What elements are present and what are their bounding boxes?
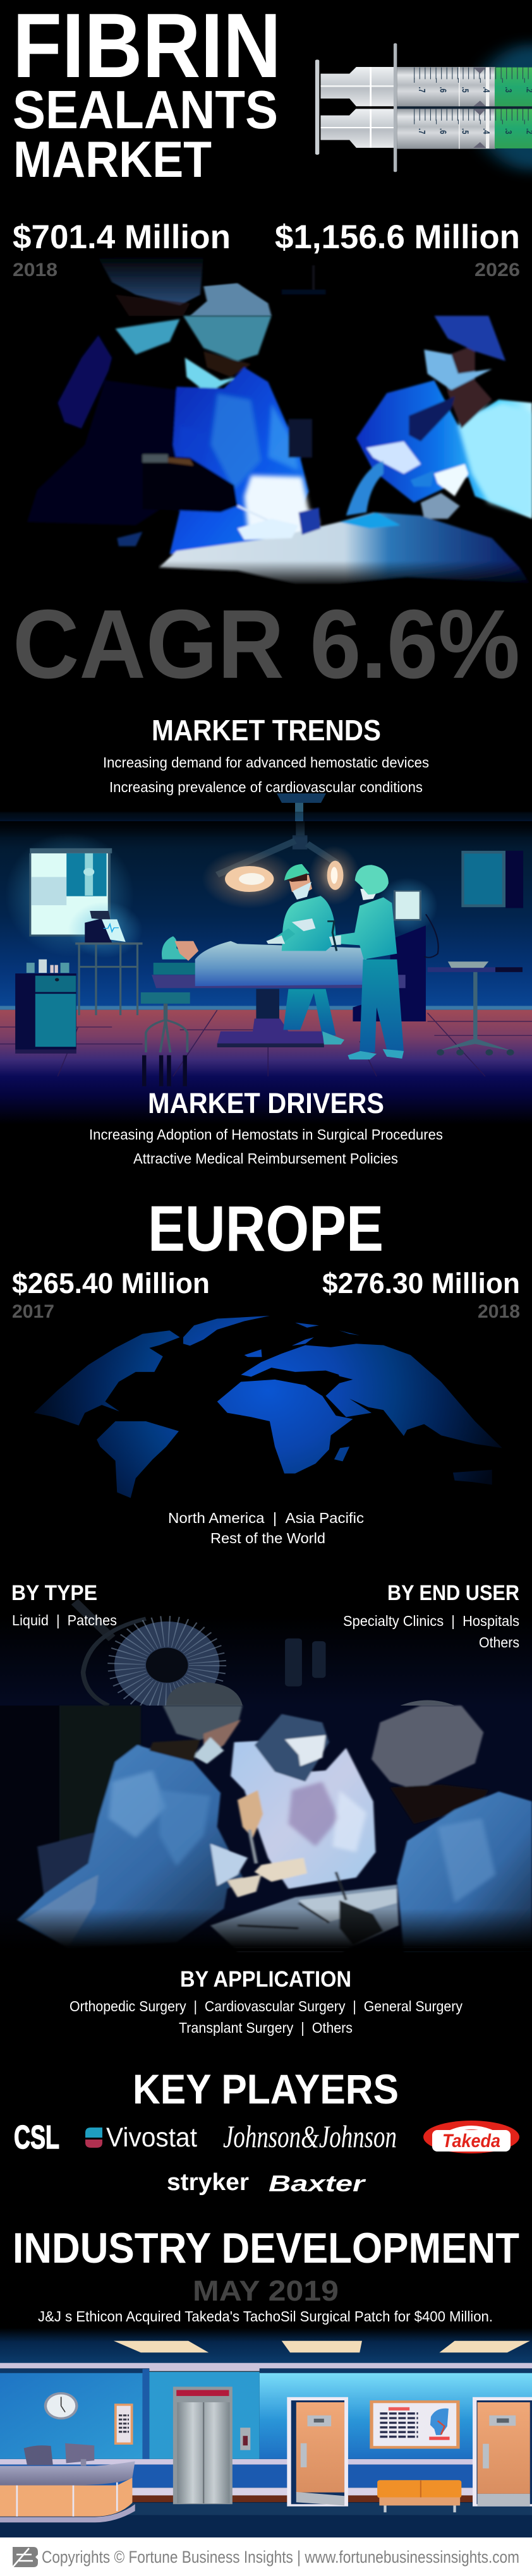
heading: by type: BY TYPE [11,1581,97,1605]
text: market drivers list [89,1126,443,1167]
icon: syringes: .4 [481,87,492,93]
map: world globe [34,1316,502,1498]
icon: Fortune Business Insights logo [13,2547,38,2567]
photo: surgical team [0,1599,532,1951]
icon: right wall screen and monitor [353,851,523,1021]
icon: operating table with patient [152,936,406,1047]
stat: 2018 market size [13,219,231,280]
stat: Europe 2018: $276.30 Million [322,1267,520,1299]
stat: 2026 market size [275,219,520,280]
stat: 2026 market size: $1,156.6 Million [275,219,520,256]
text: market trends list [103,754,429,795]
logo: Takeda [423,2121,519,2153]
text: other regions: North America | Asia Pacific [168,1510,364,1526]
text: by end user list: Others [479,1634,519,1651]
icon: bench [377,2480,461,2512]
icon: door right [473,2397,532,2507]
text: development description: J&J s Ethicon Acquired Takeda's TachoSil Surgical Patch for $400 Million. [38,2308,493,2325]
heading: by end user: BY END USER [387,1581,519,1605]
stat: 2026 market size: 2026 [475,260,520,280]
heading: Europe: EUROPE [148,1193,384,1265]
icon: surgeon [267,864,344,1045]
footer [0,2537,532,2576]
icon: door left [287,2397,348,2507]
text: other regions: Rest of the World [210,1530,325,1546]
title: SEALANTS [13,80,278,140]
icon: medicine cabinet [15,960,76,1054]
logo: Takeda: Takeda [442,2131,500,2152]
stat: Europe 2017: 2017 [12,1301,54,1322]
photo: surgeons in blue light [0,255,532,586]
icon: instrument table [428,961,523,1056]
icon: syringes: .6 [438,128,449,134]
text: market drivers list: Attractive Medical Reimbursement Policies [133,1150,398,1167]
illustration: hospital hallway [0,2328,532,2537]
text: by application list: Orthopedic Surgery | Cardiovascular Surgery | General Surgery [70,1998,462,2014]
stat: Europe 2017: $265.40 Million [12,1267,210,1299]
text: other regions [168,1510,364,1546]
icon: syringes [315,43,532,172]
icon: x-ray lightbox [5,833,134,956]
icon: syringes: .5 [460,128,471,134]
text: market trends list: Increasing prevalence of cardiovascular conditions [109,779,423,795]
icon: reception desk [0,2443,135,2522]
text: by end user list [343,1613,519,1651]
icon: syringes: .5 [460,87,471,93]
heading: market drivers: MARKET DRIVERS [148,1087,384,1119]
icon: anatomy poster [370,2400,460,2449]
fade: upper edge [0,821,532,838]
text: by application list [70,1998,462,2036]
logo: stryker: stryker [167,2169,249,2196]
icon: syringes: .6 [438,87,449,93]
title [13,0,281,188]
icon: syringes: .7 [417,128,428,134]
logo: CSL: CSL [14,2119,59,2156]
heading: by application: BY APPLICATION [180,1967,351,1992]
stat: 2018 market size: 2018 [13,260,57,280]
icon: heart monitor on cart [68,901,143,1015]
heading: key players: KEY PLAYERS [133,2066,399,2112]
text: by end user list: Specialty Clinics | Hospitals [343,1613,519,1629]
illustration: operating room [0,793,532,1124]
icon: wall clock [44,2392,78,2419]
icon: ceiling lights [114,2341,530,2352]
icon: elevator [173,2386,250,2504]
stat: 2018 market size: $701.4 Million [13,219,231,256]
stat: Europe 2018 [322,1267,520,1322]
icon: stool [141,992,190,1086]
stat: Europe 2017 [12,1267,210,1322]
icon: syringes: .3 [504,87,514,93]
text: by type list: Liquid | Patches [12,1612,117,1628]
icon: assisting nurse [327,865,404,1059]
icon: syringes: .7 [417,87,428,93]
heading: market trends: MARKET TRENDS [152,714,381,747]
title: MARKET [13,131,212,188]
text: market trends list: Increasing demand for advanced hemostatic devices [103,754,429,771]
icon: syringes: .3 [504,128,514,134]
logo: Johnson & Johnson: Johnson&Johnson [223,2119,397,2154]
date: May 2019: MAY 2019 [193,2275,339,2307]
icon: wall notice [114,2404,133,2445]
logo: Baxter: Baxter [269,2170,366,2196]
text: market drivers list: Increasing Adoption of Hemostats in Surgical Procedures [89,1126,443,1143]
logo: Vivostat: Vivostat [106,2122,197,2153]
text: by application list: Transplant Surgery | Others [179,2019,353,2036]
icon: syringes: .4 [481,128,492,135]
stat: Europe 2018: 2018 [478,1301,520,1322]
icon: surgical lamp [202,821,360,908]
